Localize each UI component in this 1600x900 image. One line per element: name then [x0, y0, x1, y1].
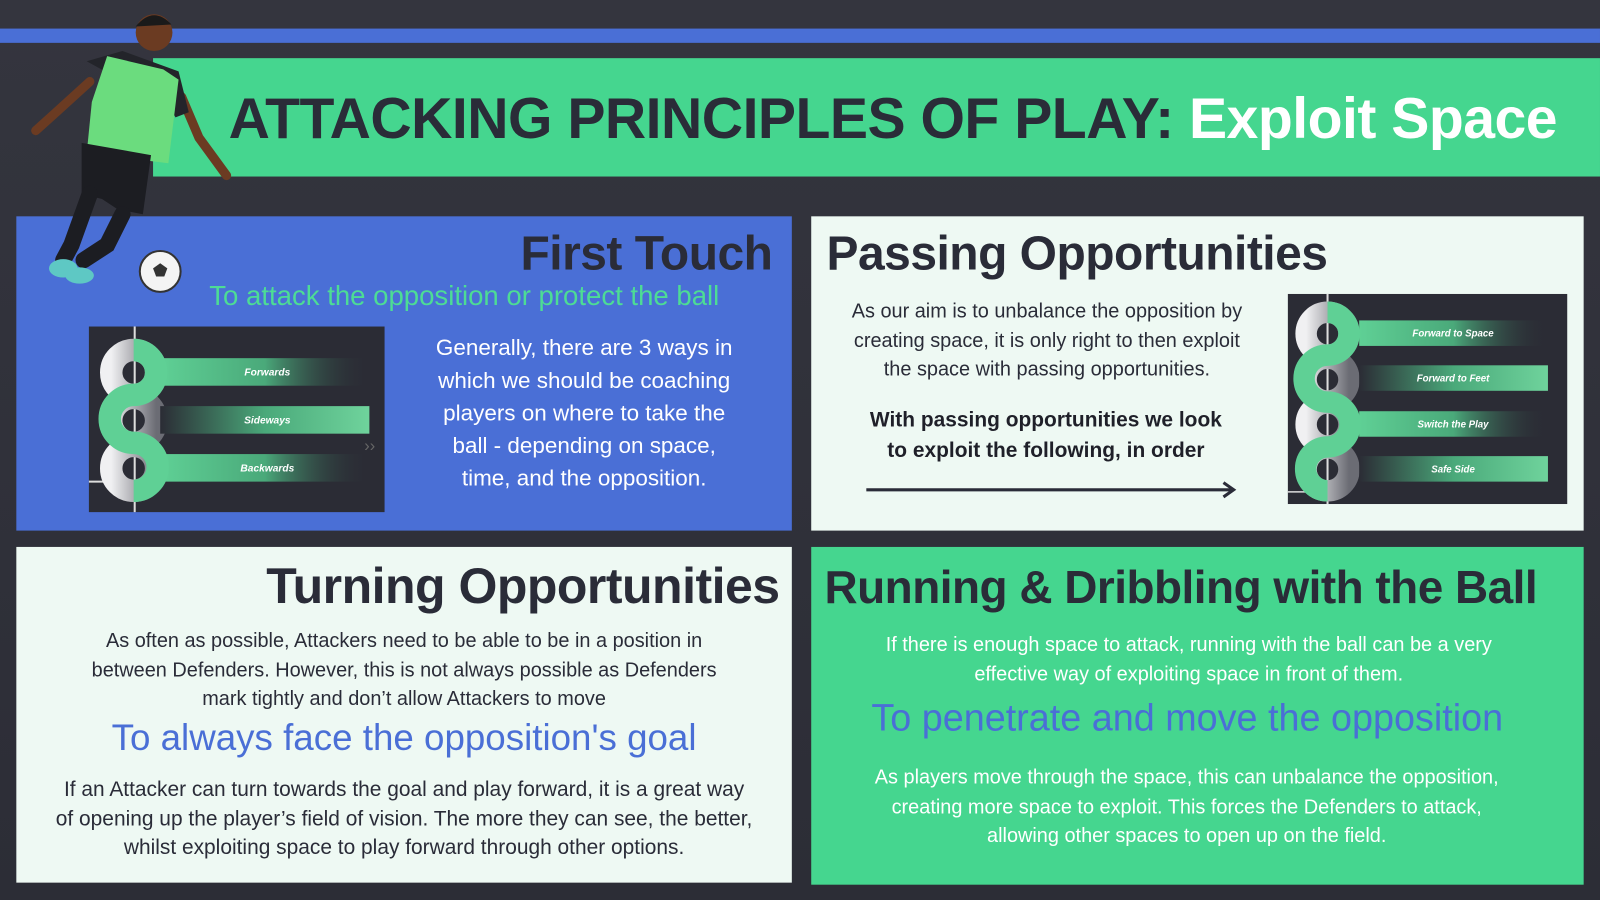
diagram: passing order: Forward to Feet	[1417, 374, 1490, 385]
diagram: first touch directions: ››	[364, 437, 375, 455]
arrow	[866, 481, 1236, 498]
text: passing intro: As our aim is to unbalance the opposition by creating space, it is only right to then exploit the space with passing opportunities.	[852, 300, 1242, 381]
player figure	[31, 14, 232, 293]
diagram: first touch directions: Forwards	[244, 368, 291, 379]
heading: passing: Passing Opportunities	[827, 226, 1327, 280]
text: three ways: Generally, there are 3 ways in which we should be coaching players on where to take the ball - depending on space, time, and the opposition.	[436, 335, 732, 491]
text: turning detail: If an Attacker can turn towards the goal and play forward, it is a great way of opening up the player’s field of vision. The more they can see, the better, whilst exploiting space to play forward through other options.	[56, 778, 752, 859]
text: running detail: As players move through the space, this can unbalance the opposition, creating more space to exploit. This forces the Defenders to attack, allowing other spaces to open up on the field.	[875, 766, 1499, 847]
panel: passing opportunities	[811, 216, 1584, 531]
text: turning intro: As often as possible, Attackers need to be able to be in a position in between Defenders. However, this is not always possible as Defenders mark tightly and don’t allow Attackers to move	[92, 630, 717, 710]
title banner	[153, 58, 1600, 177]
diagram: passing order: Forward to Space	[1412, 329, 1494, 340]
subtitle: face goal: To always face the opposition's goal	[112, 716, 697, 758]
diagram: passing order: Safe Side	[1431, 464, 1475, 475]
diagram: first touch directions: Sideways	[244, 415, 291, 426]
text: running intro: If there is enough space to attack, running with the ball can be a very effective way of exploiting space in front of them.	[886, 634, 1492, 685]
diagram: passing order	[1288, 294, 1568, 504]
top blue stripe	[0, 29, 1600, 43]
panel: running and dribbling	[811, 547, 1584, 885]
text: passing bold: With passing opportunities we look to exploit the following, in order	[870, 408, 1222, 462]
heading: running: Running & Dribbling with the Ball	[824, 561, 1537, 613]
diagram: first touch directions	[88, 326, 385, 512]
panel: first touch	[16, 216, 792, 531]
subtitle: penetrate: To penetrate and move the opposition	[871, 697, 1503, 739]
title: ATTACKING PRINCIPLES OF PLAY: Exploit Space	[229, 86, 1557, 150]
subtitle: To attack the opposition or protect the ball	[209, 281, 719, 311]
icon: ball	[140, 251, 181, 292]
diagram: passing order: Switch the Play	[1418, 420, 1489, 431]
heading: first touch: First Touch	[520, 226, 772, 280]
heading: turning: Turning Opportunities	[266, 559, 780, 614]
diagram: first touch directions: Backwards	[240, 463, 295, 474]
panel: turning opportunities	[16, 547, 792, 883]
